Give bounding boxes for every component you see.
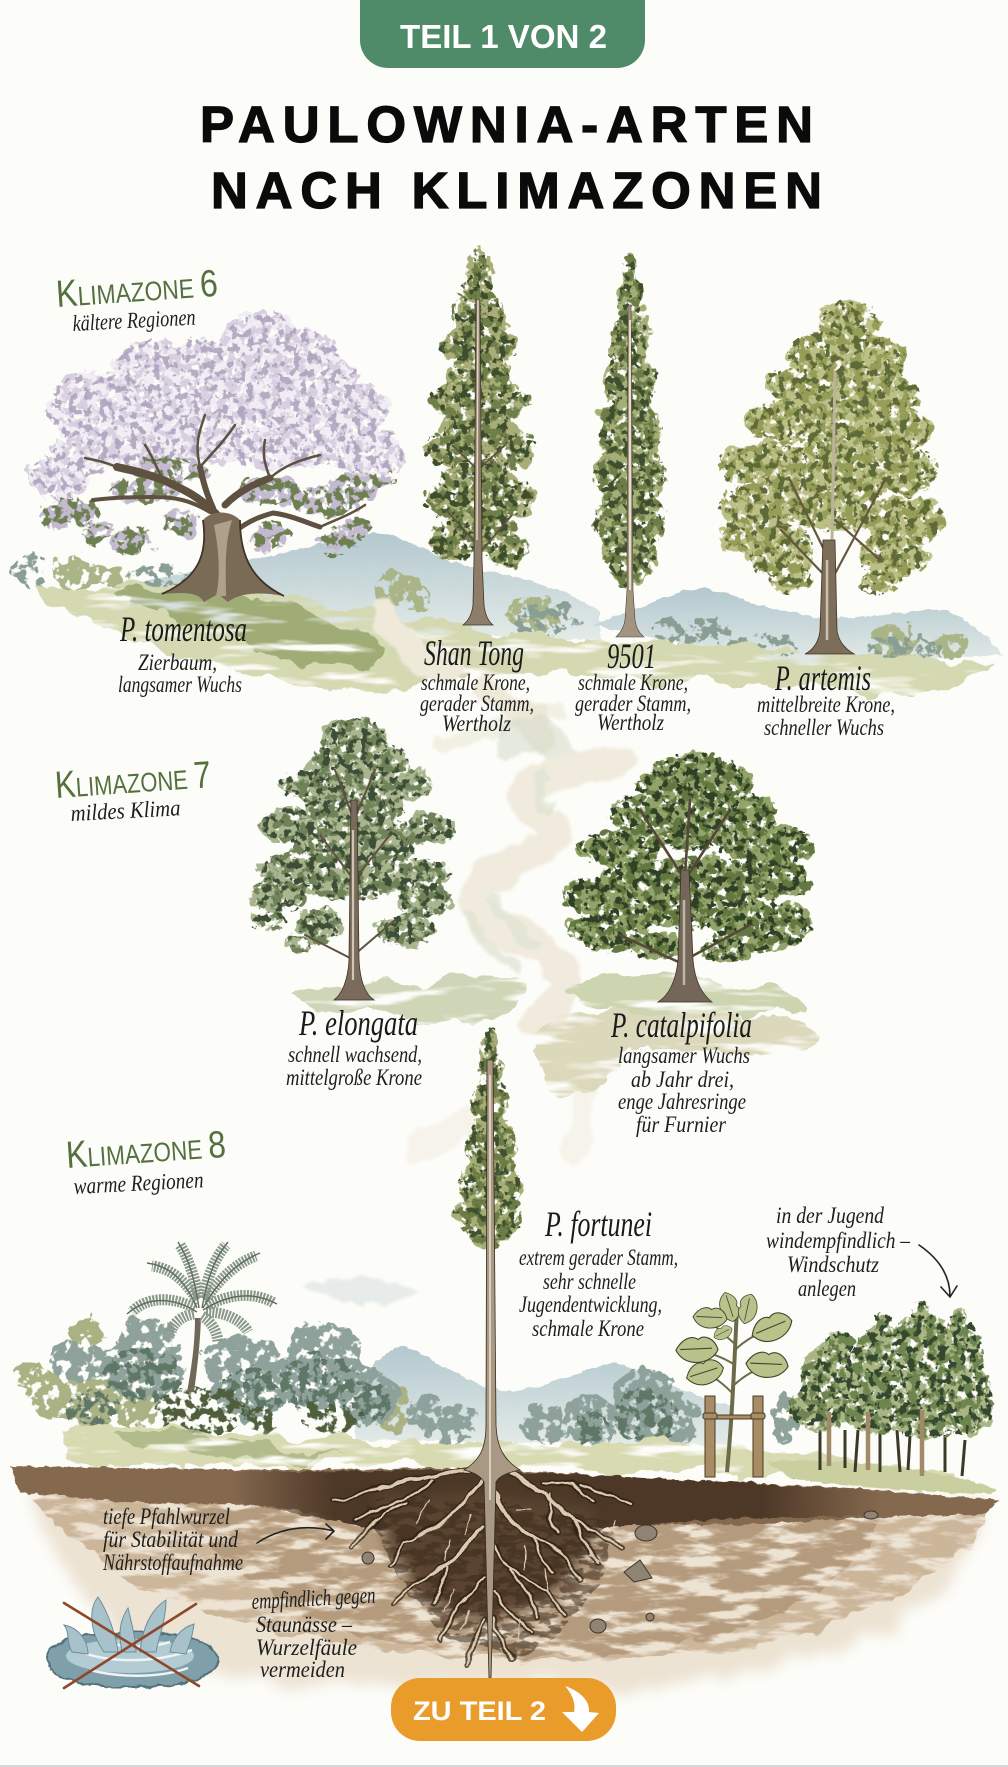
callout: wind protection: windempfindlich – xyxy=(766,1228,910,1253)
callout: taproot xyxy=(102,1504,243,1575)
label: 9501: schmale Krone, xyxy=(578,670,688,695)
label: Shan Tong: gerader Stamm, xyxy=(420,691,534,716)
label: P. tomentosa: P. tomentosa xyxy=(119,609,247,649)
heading: Klimazone 7: KLIMAZONE 7 xyxy=(54,754,212,807)
heading: Klimazone 6: KLIMAZONE 6 xyxy=(55,263,219,316)
label: P. elongata: mittelgroße Krone xyxy=(286,1065,422,1090)
windbreak trees xyxy=(767,1301,997,1494)
callout: waterlogging: vermeiden xyxy=(260,1657,345,1682)
label: 9501: 9501 xyxy=(607,636,656,676)
palm tree xyxy=(127,1242,277,1392)
label: 9501 xyxy=(575,636,691,735)
arrow: to taproot xyxy=(257,1524,334,1543)
soil profile xyxy=(10,1466,1000,1686)
callout: waterlogging xyxy=(251,1583,376,1682)
label: P. catalpifolia: ab Jahr drei, xyxy=(631,1067,734,1092)
top badge: part 1 of 2 xyxy=(360,0,645,68)
tree: Shan Tong xyxy=(423,249,534,625)
ground washes zone 7 xyxy=(286,975,825,1098)
callout: wind protection: anlegen xyxy=(798,1276,856,1301)
tree: P. catalpifolia xyxy=(562,755,812,1002)
label: P. tomentosa: Zierbaum, xyxy=(138,650,217,675)
callout: taproot: für Stabilität und xyxy=(103,1527,238,1552)
button: to part 2: ZU TEIL 2 xyxy=(413,1696,546,1726)
label: P. elongata: schnell wachsend, xyxy=(288,1042,422,1067)
label: P. tomentosa xyxy=(118,609,247,697)
label: P. artemis xyxy=(757,658,895,740)
top badge: part 1 of 2: TEIL 1 VON 2 xyxy=(400,18,607,55)
label: P. catalpifolia: für Furnier xyxy=(636,1112,727,1137)
callout: waterlogging: Staunässe – xyxy=(256,1612,352,1637)
label: P. fortunei: schmale Krone xyxy=(532,1316,644,1341)
callout: taproot: tiefe Pfahlwurzel xyxy=(103,1504,230,1529)
heading: Klimazone 8: warme Regionen xyxy=(73,1167,204,1199)
icon: waterlogging puddle crossed out xyxy=(46,1597,218,1688)
tree: 9501 xyxy=(595,255,665,637)
callout: wind protection: in der Jugend xyxy=(776,1203,884,1228)
landscape: zone 6 ground and hills xyxy=(14,533,1004,695)
label: P. catalpifolia: langsamer Wuchs xyxy=(618,1043,750,1068)
callout: taproot: Nährstoffaufnahme xyxy=(102,1550,243,1575)
label: 9501: gerader Stamm, xyxy=(575,691,691,716)
label: P. catalpifolia: enge Jahresringe xyxy=(618,1089,746,1114)
label: 9501: Wertholz xyxy=(597,710,664,735)
winding path xyxy=(382,610,623,1150)
heading: Klimazone 6: kältere Regionen xyxy=(72,305,196,336)
label: P. fortunei xyxy=(519,1204,678,1341)
label: Shan Tong: schmale Krone, xyxy=(421,670,530,695)
label: P. fortunei: sehr schnelle xyxy=(543,1269,636,1294)
label: P. fortunei: P. fortunei xyxy=(544,1204,652,1244)
label: Shan Tong: Wertholz xyxy=(442,711,511,736)
button: to part 2 xyxy=(391,1678,616,1741)
label: Shan Tong: Shan Tong xyxy=(424,633,524,673)
label: P. tomentosa: langsamer Wuchs xyxy=(118,672,242,697)
label: P. fortunei: Jugendentwicklung, xyxy=(519,1292,662,1317)
tree: P. tomentosa xyxy=(30,313,403,602)
label: P. fortunei: extrem gerader Stamm, xyxy=(519,1245,678,1270)
tree: P. artemis xyxy=(719,303,945,654)
label: P. elongata xyxy=(286,1003,422,1090)
label: P. catalpifolia: P. catalpifolia xyxy=(610,1005,752,1045)
bottom edge line xyxy=(0,1765,1008,1767)
icon: down arrow xyxy=(562,1686,599,1732)
tree: P. elongata xyxy=(254,718,453,1000)
callout: waterlogging: empfindlich gegen xyxy=(251,1583,376,1614)
heading: Klimazone 8: KLIMAZONE 8 xyxy=(65,1124,227,1177)
label: P. artemis: mittelbreite Krone, xyxy=(757,692,895,717)
label: P. elongata: P. elongata xyxy=(298,1003,418,1043)
label: Shan Tong xyxy=(420,633,534,736)
title: PAULOWNIA-ARTEN xyxy=(200,96,813,153)
sapling with stakes xyxy=(675,1291,796,1477)
heading: Klimazone 8 xyxy=(65,1124,227,1199)
label: P. artemis: P. artemis xyxy=(774,658,871,698)
callout: wind protection: Windschutz xyxy=(787,1252,879,1277)
label: P. catalpifolia xyxy=(610,1005,752,1137)
label: P. artemis: schneller Wuchs xyxy=(764,715,884,740)
title xyxy=(200,96,822,219)
tree: P. fortunei with trunk and roots xyxy=(333,1031,878,1678)
callout: waterlogging: Wurzelfäule xyxy=(256,1635,357,1660)
landscape: zone 8 background xyxy=(15,1279,990,1492)
callout: wind protection xyxy=(766,1203,910,1301)
title: NACH KLIMAZONEN xyxy=(211,162,822,219)
arrow: to windbreak xyxy=(919,1245,957,1297)
heading: Klimazone 7: mildes Klima xyxy=(70,795,181,826)
